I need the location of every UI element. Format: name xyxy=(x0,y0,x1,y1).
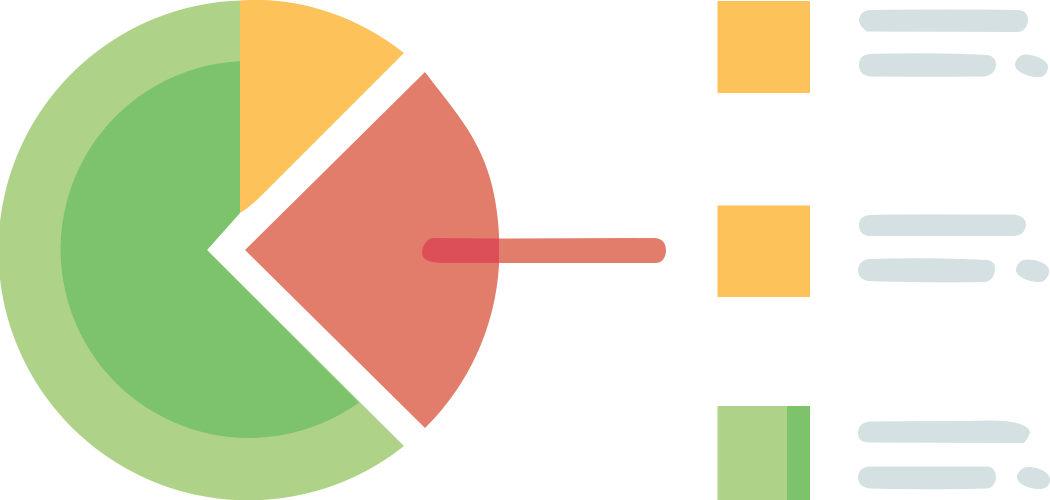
connector: outer segment xyxy=(499,238,666,263)
text placeholder blob xyxy=(1017,467,1050,489)
legend row 2 xyxy=(718,206,1049,297)
pie slice: yellow xyxy=(240,0,404,213)
text placeholder line 2 xyxy=(858,466,996,489)
connector bar xyxy=(422,238,666,263)
pie slice: light green outer ring xyxy=(0,0,404,500)
text placeholder blob xyxy=(1015,54,1048,77)
connector: overlap on slice xyxy=(422,238,499,263)
swatch: yellow xyxy=(718,206,810,297)
text placeholder line 1 xyxy=(859,214,1026,236)
legend row 3 xyxy=(718,406,1050,500)
text placeholder line 2 xyxy=(859,53,996,77)
pie slice: red exploded xyxy=(245,72,500,428)
legend row 1 xyxy=(718,1,1048,93)
swatch: light green xyxy=(718,406,788,500)
text placeholder line 1 xyxy=(858,420,1030,443)
swatch: yellow xyxy=(718,1,810,93)
text placeholder blob xyxy=(1016,260,1049,282)
text placeholder line 2 xyxy=(858,258,995,282)
pie slice: dark green inner xyxy=(61,61,359,438)
text placeholder line 1 xyxy=(859,10,1028,32)
pie chart xyxy=(0,0,499,500)
swatch: dark green xyxy=(787,406,810,500)
